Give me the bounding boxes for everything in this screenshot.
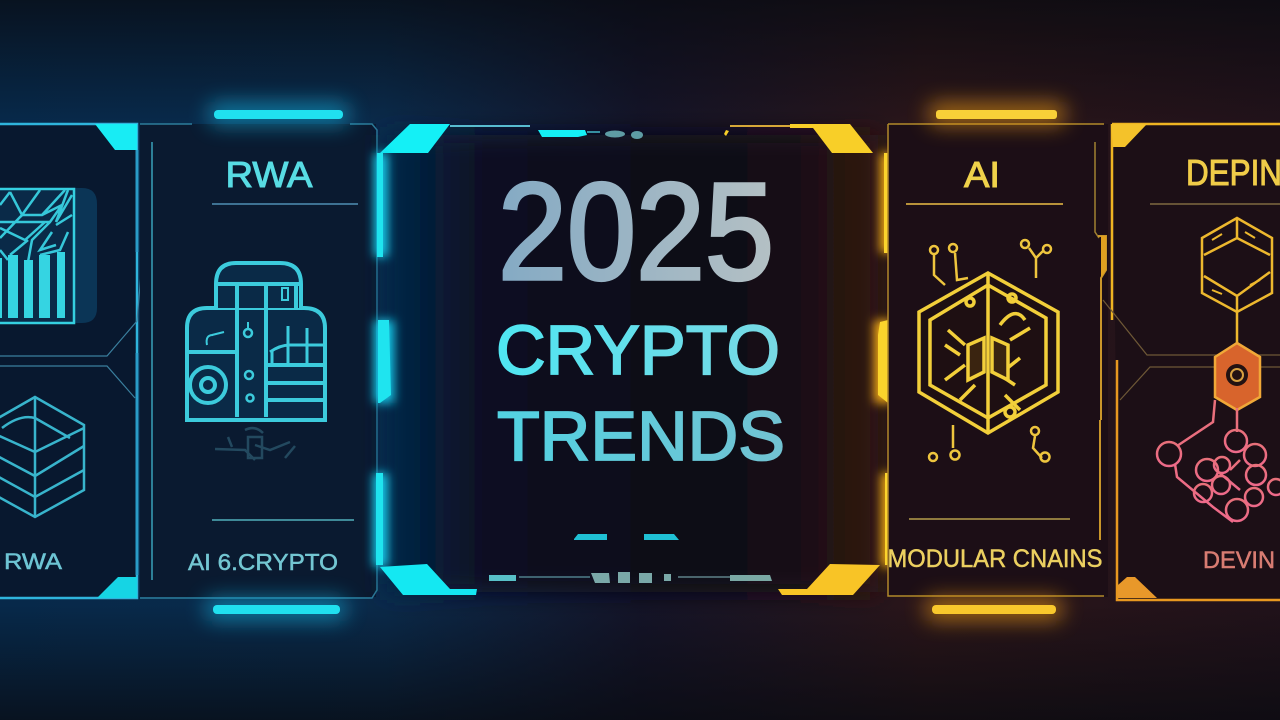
frame: cyan side rails xyxy=(373,153,394,567)
icon: layered cube xyxy=(0,397,84,517)
label: DePIN lower: DEVIN xyxy=(1203,547,1275,574)
panel: far-left RWA card xyxy=(0,124,143,598)
frame: bottom center marks xyxy=(591,572,772,583)
title: 2025: 2025 xyxy=(498,155,774,309)
accent: amber bottom glow bar xyxy=(925,597,1063,621)
frame: amber side rails xyxy=(874,153,893,567)
heading: RWA: RWA xyxy=(226,154,312,195)
label: AI and crypto: AI 6.CRYPTO xyxy=(188,549,338,575)
icon: top wedge xyxy=(1111,124,1147,147)
label: Modular Chains: MODULAR CNAINS xyxy=(888,545,1102,573)
icon: city block building xyxy=(187,263,325,420)
frame: amber bottom bracket xyxy=(778,564,880,595)
panel: AI / Modular Chains card xyxy=(888,124,1108,597)
panel: central title frame xyxy=(373,124,893,595)
frame: cyan top bracket xyxy=(380,124,600,153)
icon: top corner wedge xyxy=(95,124,137,150)
icon: circuit pins xyxy=(929,240,1051,462)
icon: hexagon node xyxy=(1202,218,1272,343)
icon: orange hexagon node xyxy=(1215,343,1260,410)
accent: amber top glow bar xyxy=(928,102,1066,126)
accent: cyan bottom glow bar xyxy=(205,597,347,621)
icon: pink network cluster xyxy=(1157,400,1280,522)
panel: RWA / AI and Crypto card xyxy=(140,124,377,598)
title: TRENDS: TRENDS xyxy=(497,397,785,475)
icon: circuit hexagon xyxy=(919,273,1058,433)
label: RWA lower: RWA xyxy=(4,549,62,574)
frame: cyan bottom bracket xyxy=(380,534,679,595)
icon: bottom wedge xyxy=(1118,577,1157,598)
accent: cyan top glow bar xyxy=(208,102,350,126)
frame: top debris marks xyxy=(605,130,643,139)
panel: far-right DePIN card xyxy=(1103,124,1280,600)
title: CRYPTO: CRYPTO xyxy=(496,311,780,389)
icon: bar chart with cracked network xyxy=(0,188,97,323)
frame: amber top bracket xyxy=(724,124,873,153)
icon: faint emblem under building xyxy=(215,428,295,460)
heading: AI: AI xyxy=(964,154,1000,195)
